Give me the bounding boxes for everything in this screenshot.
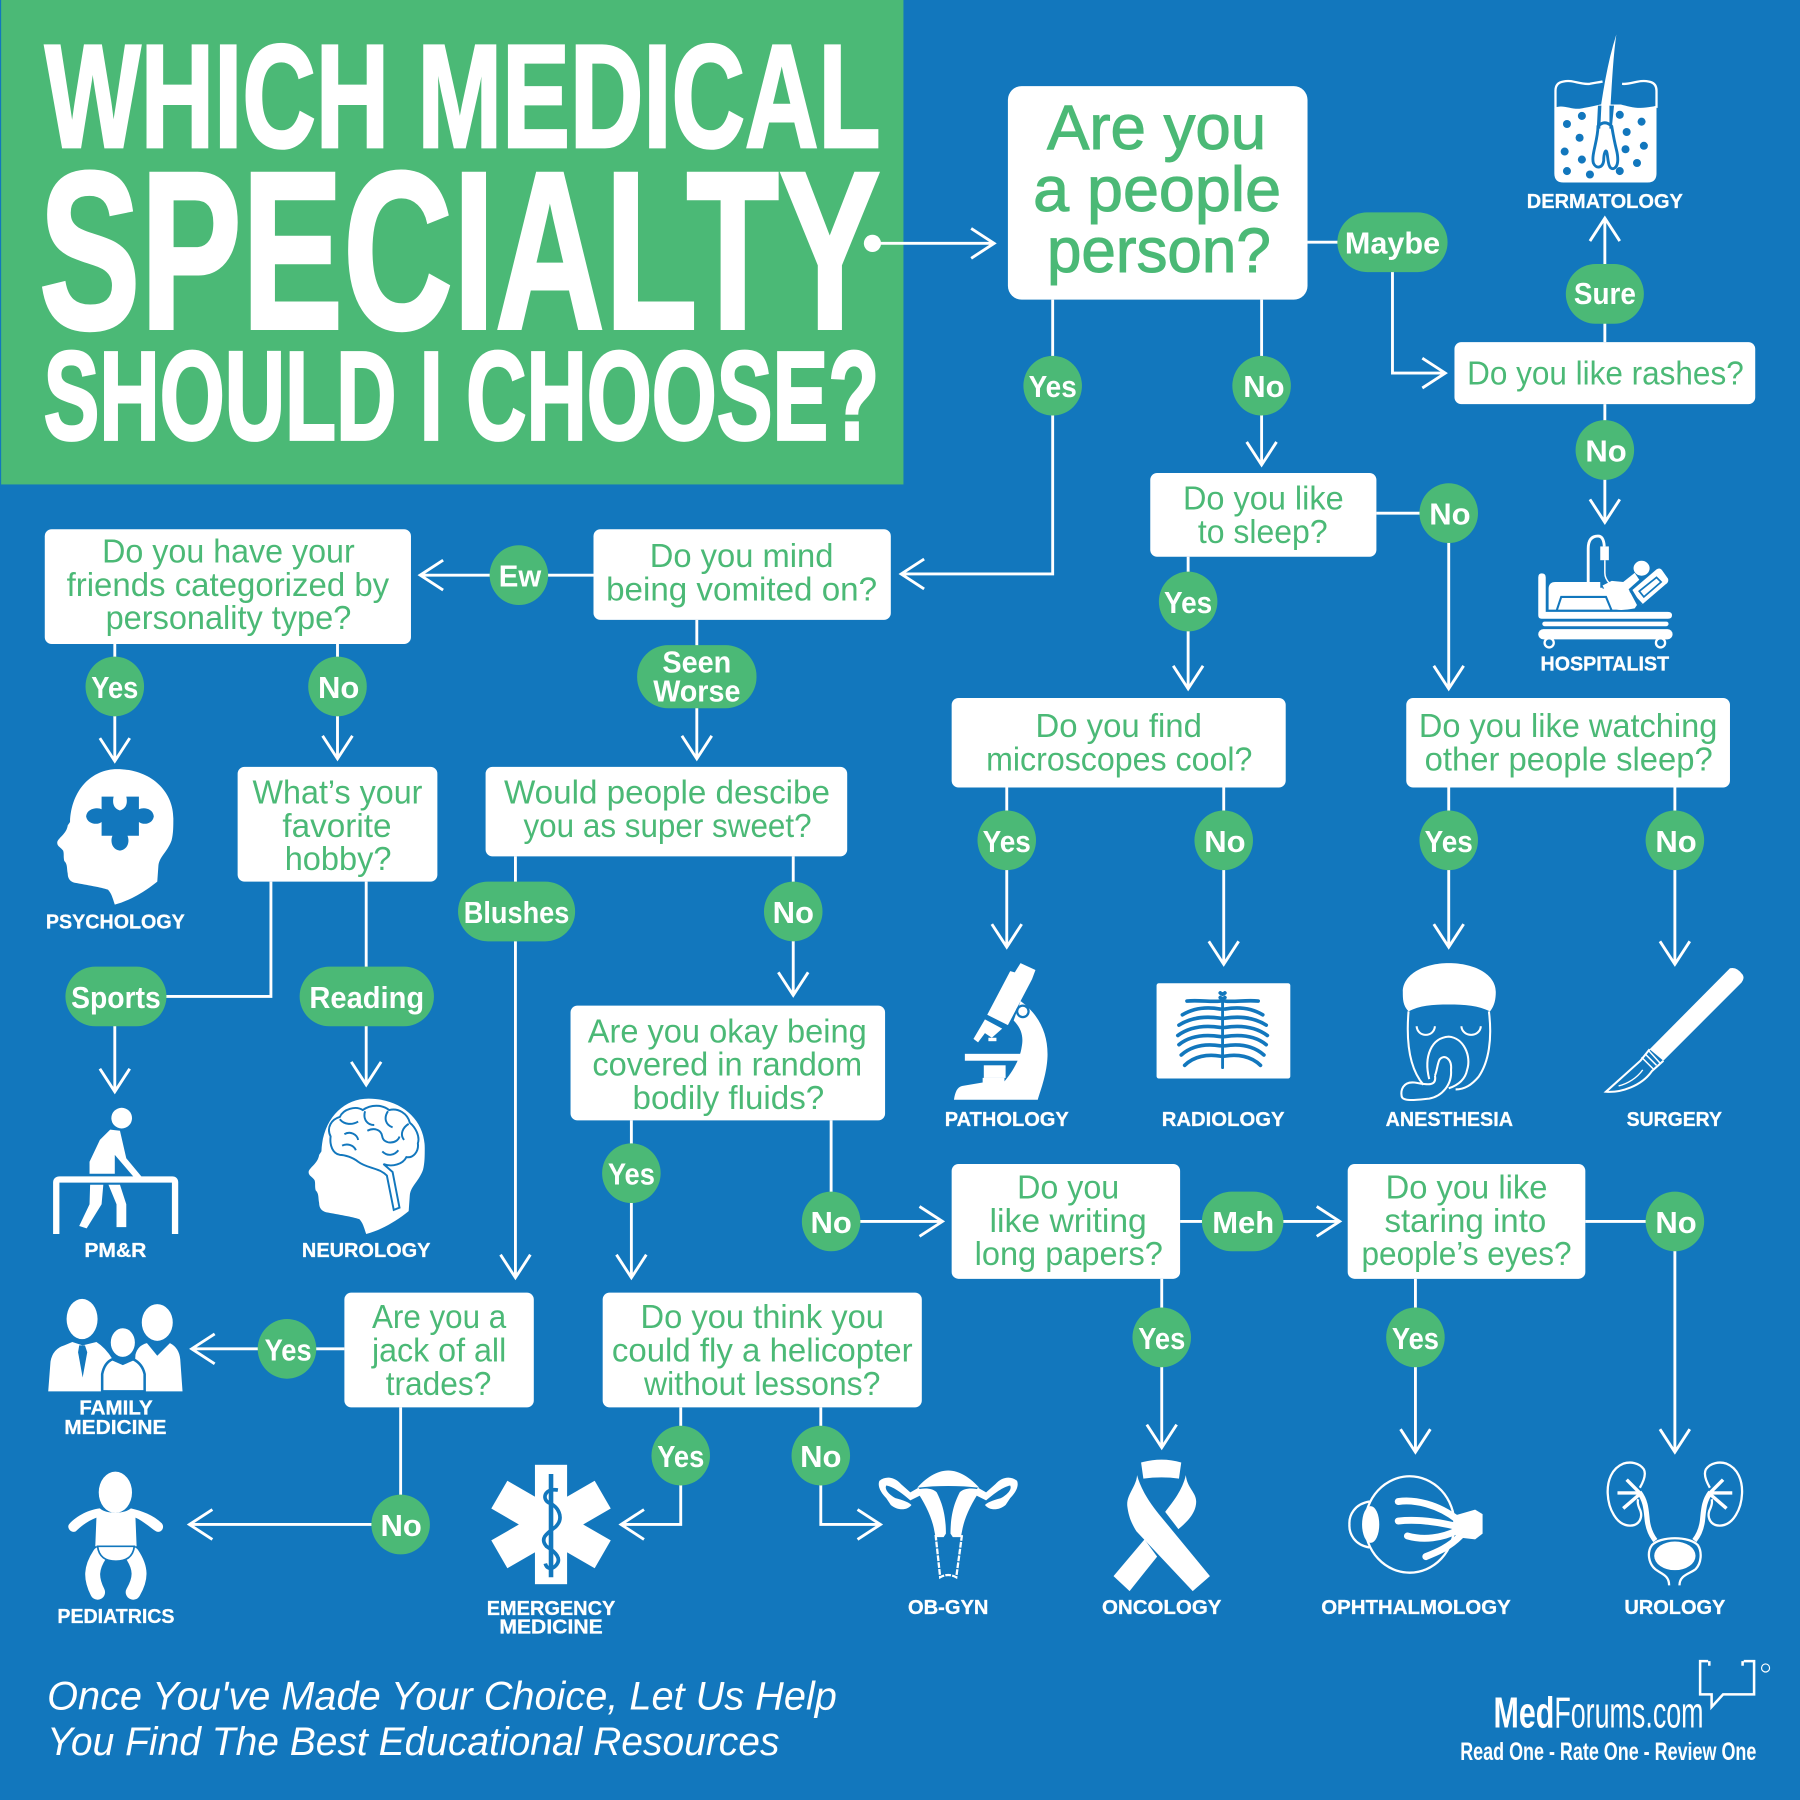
question: sleep: to sleep? [1198,514,1328,551]
pill: No microscopes: No [1204,824,1246,859]
question: staring into eyes [1348,1164,1585,1279]
icon: radiology x-ray [1157,983,1290,1079]
arrow: watching no to surgery [1660,788,1690,964]
pill: Yes fluids: Yes [608,1157,655,1192]
pill: Yes papers: Yes [1138,1321,1185,1356]
pill: Yes microscopes [977,810,1036,870]
question: rashes: Do you like rashes? [1467,356,1744,393]
pill: Yes people person: Yes [1029,369,1077,404]
pill: No people person: No [1243,369,1285,404]
pill: No people person [1232,356,1291,416]
question: watching sleep: Do you like watching [1419,708,1717,745]
pill: Meh [1202,1192,1283,1251]
pill: Yes jack [258,1319,316,1379]
question: microscopes: microscopes cool? [986,741,1252,778]
pill: Seen Worse: Seen [662,645,731,680]
arrow: eyes no to urology [1585,1221,1690,1452]
pill: Yes friends: Yes [91,670,138,705]
pill: Reading [300,967,434,1026]
label: anesthesia: ANESTHESIA [1386,1109,1513,1131]
icon: speech bubble [1700,1661,1754,1707]
label: pediatrics: PEDIATRICS [57,1606,174,1628]
title line 1: WHICH MEDICAL [45,15,880,179]
icon: oncology ribbon [1114,1460,1210,1591]
icon: hospital bed [1538,536,1673,647]
label: neurology: NEUROLOGY [302,1240,431,1262]
question: are you a people person: person? [1047,216,1271,286]
question: friends categorized [45,529,411,644]
label: urology: UROLOGY [1624,1597,1726,1619]
pill: No watching: No [1655,824,1697,859]
question: favorite hobby [238,767,437,882]
icon: microscope [954,963,1048,1100]
arrow: vomited ew to friends [420,560,593,590]
arrow: microscopes no to radiology [1209,788,1239,964]
question: bodily fluids: Are you okay being [588,1013,867,1050]
arrow: rashes sure to dermatology [1590,218,1620,342]
arrow: fluids yes to helicopter [616,1120,646,1278]
pill: No rashes: No [1585,433,1627,468]
question: watching sleep [1406,698,1730,788]
arrow: fluids no to papers [831,1120,942,1236]
pill: Yes helicopter [651,1426,710,1485]
question: writing papers [952,1164,1180,1279]
pill: No eyes [1646,1192,1704,1251]
arrow: jack yes to family medicine [192,1334,344,1364]
question: vomited on [593,529,891,620]
pill: No helicopter [792,1426,850,1485]
pill: Yes eyes [1386,1308,1445,1367]
pill: Yes eyes: Yes [1392,1321,1439,1356]
logo: MedForums: Med [1493,1690,1554,1738]
label: ophthalmology: OPHTHALMOLOGY [1321,1597,1511,1619]
arrow: helicopter no to ob-gyn [821,1407,880,1539]
icon: dermatology skin and hair [1554,34,1657,183]
arrow: hobby reading to neurology [351,882,381,1085]
pill: No fluids: No [810,1205,852,1240]
question: watching sleep: other people sleep? [1425,741,1713,778]
arrow: rashes no to hospitalist [1590,404,1620,522]
pill: No helicopter: No [800,1439,841,1474]
question: favorite hobby: What’s your [253,775,422,812]
pill: Sure: Sure [1574,276,1636,311]
arrow: papers yes to oncology [1147,1279,1177,1448]
question: bodily fluids: bodily fluids? [633,1080,824,1117]
pill: No friends: No [318,670,359,705]
label: ob-gyn: OB-GYN [908,1597,988,1619]
pill: Sports [65,967,166,1026]
pill: Yes sleep: Yes [1164,585,1212,620]
pill: Meh: Meh [1212,1205,1274,1240]
question: sleep: Do you like [1183,481,1344,518]
question: jack of all trades: trades? [386,1366,491,1403]
pill: Yes microscopes: Yes [983,824,1031,859]
pill: Yes helicopter: Yes [657,1439,704,1474]
label: oncology: ONCOLOGY [1102,1597,1222,1619]
arrow: friends yes to psychology [100,644,130,761]
footer call to action: Once You've Made Your Choice, Let Us Help [47,1673,837,1718]
pill: Yes papers [1132,1308,1191,1367]
pill: Yes fluids [602,1143,661,1203]
pill: Maybe: Maybe [1345,226,1440,261]
pill: Yes jack: Yes [265,1332,312,1367]
arrow: people person yes to vomited [901,300,1053,589]
question: jack of all trades [344,1293,534,1407]
question: favorite hobby: favorite [282,808,391,845]
pill: Sure [1566,264,1644,324]
question: writing papers: long papers? [975,1236,1163,1273]
question: vomited on: Do you mind [650,538,833,575]
label: dermatology: DERMATOLOGY [1527,191,1684,213]
label: pathology: PATHOLOGY [945,1109,1069,1131]
pill: Maybe [1337,212,1448,272]
pill: No friends [308,657,367,716]
footer call to action: You Find The Best Educational Resources [47,1719,779,1764]
pill: Ew [490,545,548,605]
question: vomited on: being vomited on? [606,571,877,608]
question: writing papers: Do you [1017,1169,1119,1206]
question: are you a people person: a people [1033,155,1281,225]
pill: No sleep: No [1429,497,1471,532]
question: bodily fluids [571,1006,885,1120]
pill: Seen Worse [637,645,757,708]
question: super sweet: Would people descibe [504,775,830,812]
label: radiology: RADIOLOGY [1162,1109,1285,1131]
arrow: eyes yes to ophthalmology [1401,1279,1430,1452]
pill: Blushes [458,882,575,941]
pill: Blushes: Blushes [464,895,569,930]
icon: psychology head with puzzle [57,769,173,905]
label: emergency medicine [487,1598,616,1639]
arrow: title to first question [864,228,994,258]
question: are you a people person [1008,86,1308,300]
arrow: sweet no to fluids [778,856,808,995]
title line 3: SHOULD I CHOOSE? [44,326,879,467]
icon: urology kidneys and bladder [1608,1463,1742,1585]
pill: No watching [1646,810,1704,870]
arrow: hobby sports to pm&r [100,882,271,1092]
arrow: sleep yes to microscopes [1173,557,1203,689]
arrow: papers meh to eyes [1180,1207,1340,1236]
question: microscopes: Do you find [1035,708,1202,745]
pill: No jack: No [381,1508,422,1543]
arrow: sleep no to watching [1376,513,1464,689]
arrow: vomited seen worse to sweet [682,620,712,759]
question: are you a people person: Are you [1047,93,1266,163]
label: family medicine: FAMILY [79,1397,153,1419]
label: family medicine: MEDICINE [64,1417,166,1439]
icon: anesthesia patient with mask [1401,963,1496,1100]
pill: Sports: Sports [71,980,161,1015]
footer call to action [47,1673,837,1764]
pill: No sleep [1419,483,1478,543]
pill: Yes sleep [1159,572,1217,631]
question: friends categorized: personality type? [106,600,351,637]
icon: ophthalmology eye [1349,1476,1483,1573]
icon: emergency medicine star of life [491,1465,611,1584]
question: rashes [1454,342,1755,404]
question: jack of all trades: jack of all [371,1332,506,1369]
question: jack of all trades: Are you a [372,1299,507,1336]
pill: No eyes: No [1655,1205,1697,1240]
pill: Reading: Reading [309,980,424,1015]
arrow: friends no to hobby [323,644,352,759]
pill: Yes friends [86,657,144,716]
pill: No sweet [764,882,823,941]
arrow: people person no to sleep [1247,300,1277,465]
label: emergency medicine: EMERGENCY [487,1598,616,1620]
icon: pm&r patient on parallel bars [56,1108,175,1234]
title panel [1,0,903,484]
icon: pediatrics baby [68,1472,163,1592]
pill: No fluids [802,1192,860,1251]
label: emergency medicine: MEDICINE [499,1617,603,1639]
arrow: people person maybe to rashes [1308,242,1445,388]
title line 2: SPECIALTY [39,124,880,376]
pill: Yes people person [1023,356,1082,416]
question: staring into eyes: staring into [1384,1203,1546,1240]
question: microscopes [952,698,1286,788]
icon: family medicine people [48,1299,183,1391]
label: family medicine [64,1397,166,1439]
question: bodily fluids: covered in random [592,1047,862,1084]
pill: Seen Worse: Worse [653,673,740,708]
arrow: helicopter yes to emergency medicine [621,1407,681,1539]
pill: No microscopes [1194,810,1253,870]
question: friends categorized: Do you have your [102,533,355,570]
pill: Yes watching: Yes [1425,824,1473,859]
question: helicopter: could fly a helicopter [612,1332,913,1369]
logo: MedForums: Forums.com [1554,1690,1704,1738]
question: favorite hobby: hobby? [285,841,391,878]
pill: Ew: Ew [499,559,542,594]
question: sleep [1150,473,1376,557]
logo: MedForums [1460,1661,1770,1766]
arrow: sweet blushes to jack [501,856,530,1278]
question: staring into eyes: Do you like [1386,1169,1547,1206]
pill: No jack [371,1495,430,1554]
arrow: watching yes to anesthesia [1434,788,1464,947]
icon: surgery scalpel [1606,968,1744,1092]
question: staring into eyes: people’s eyes? [1361,1236,1572,1273]
label: hospitalist: HOSPITALIST [1541,653,1670,675]
icon: neurology head with brain [309,1099,425,1234]
question: friends categorized: friends categorized by [67,567,390,604]
label: psychology: PSYCHOLOGY [46,912,185,934]
question: writing papers: like writing [990,1203,1147,1240]
arrow: jack no to pediatrics [189,1407,401,1539]
question: helicopter: Do you think you [641,1299,884,1336]
pill: Yes watching [1419,810,1478,870]
pill: No rashes [1576,420,1634,480]
question: helicopter [603,1293,922,1407]
question: super sweet [486,767,847,856]
label: surgery: SURGERY [1627,1109,1723,1131]
pill: No sweet: No [773,895,814,930]
question: helicopter: without lessons? [643,1366,880,1403]
label: pm&r: PM&R [84,1240,147,1262]
arrow: microscopes yes to pathology [992,788,1022,947]
question: super sweet: you as super sweet? [523,808,812,845]
icon: ob-gyn uterus [879,1471,1018,1577]
